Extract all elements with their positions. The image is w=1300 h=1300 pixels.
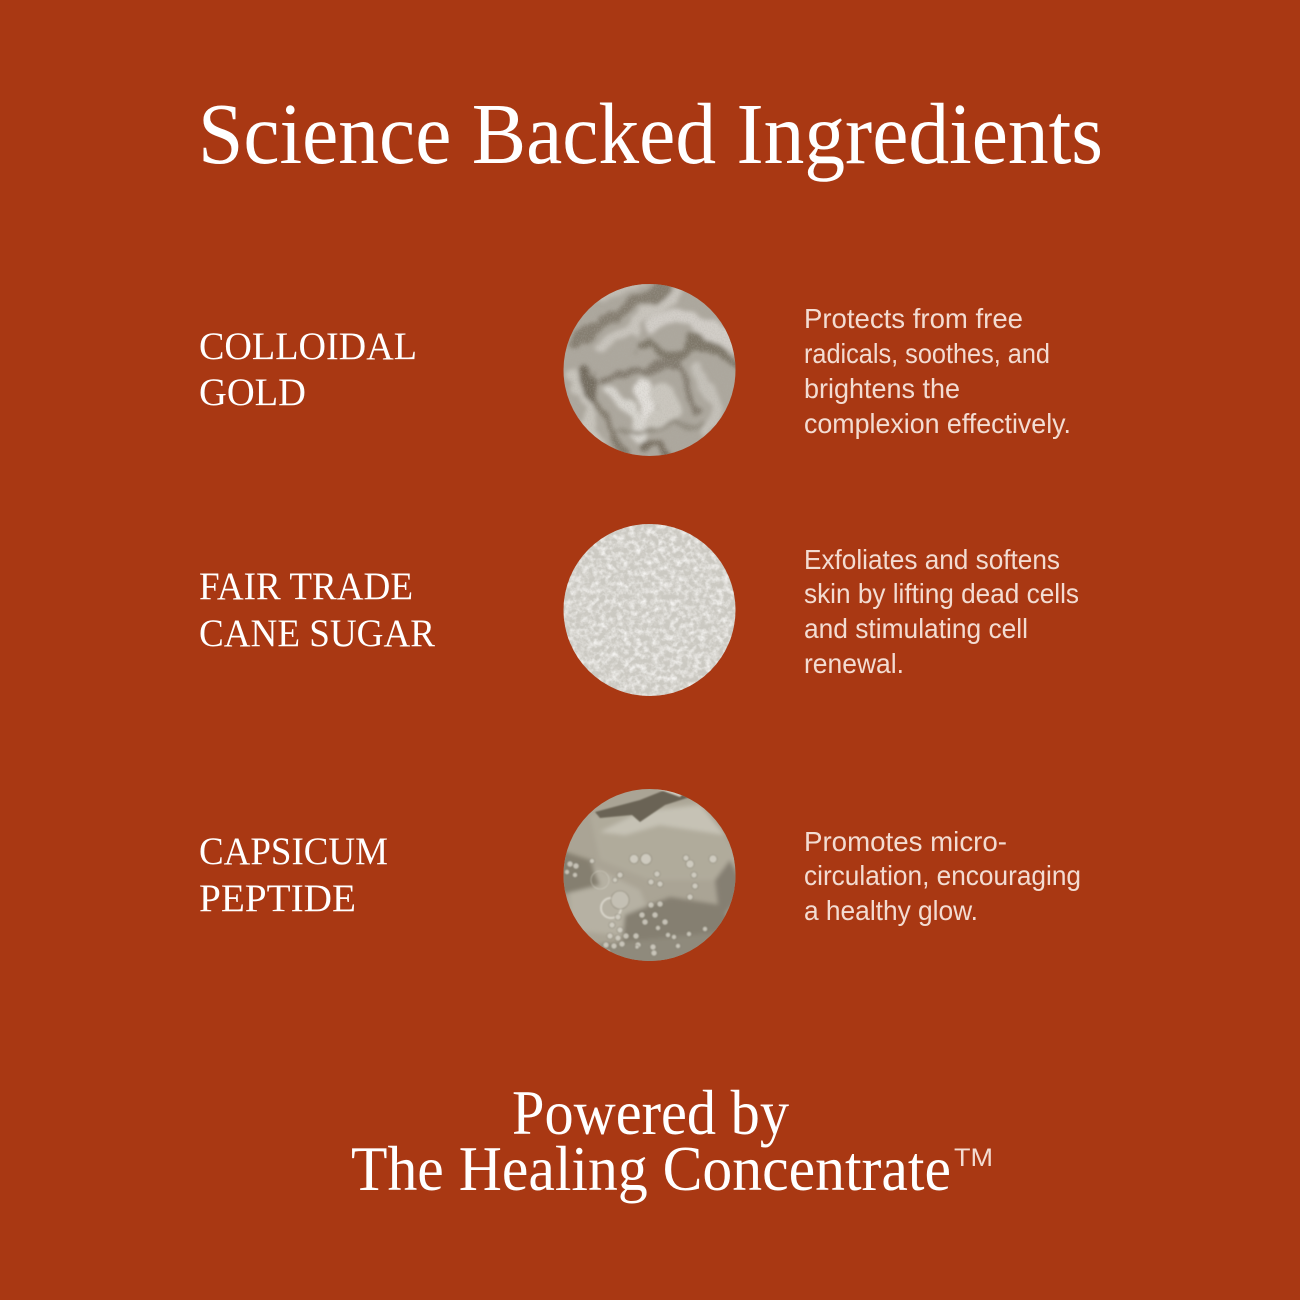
- ingredient name: fair trade cane sugar: [199, 565, 435, 655]
- ingredient name: colloidal gold: GOLD: [199, 371, 306, 414]
- ingredient name: colloidal gold: COLLOIDAL: [199, 325, 417, 368]
- description: cane sugar: renewal.: [804, 648, 904, 679]
- row: capsicum peptide: [199, 785, 1081, 970]
- description: capsicum peptide: Promotes micro-: [804, 826, 1007, 857]
- ingredient name: capsicum peptide: CAPSICUM: [199, 830, 388, 873]
- footer: powered by: [351, 1077, 993, 1204]
- ingredient name: capsicum peptide: [199, 830, 388, 920]
- description: cane sugar: and stimulating cell: [804, 613, 1028, 644]
- image: gel bubbles texture: [564, 789, 736, 961]
- title: Science Backed Ingredients: [198, 85, 1103, 182]
- row: colloidal gold: [199, 280, 1071, 460]
- description: colloidal gold: [804, 303, 1071, 439]
- description: colloidal gold: Protects from free: [804, 303, 1023, 334]
- footer: powered by: Powered by: [512, 1077, 789, 1148]
- description: colloidal gold: radicals, soothes, and: [804, 338, 1050, 369]
- description: colloidal gold: complexion effectively.: [804, 408, 1071, 439]
- ingredient name: capsicum peptide: PEPTIDE: [199, 877, 356, 920]
- description: colloidal gold: brightens the: [804, 373, 960, 404]
- ingredient name: fair trade cane sugar: FAIR TRADE: [199, 565, 413, 608]
- footer: powered by: The Healing Concentrate: [351, 1133, 951, 1204]
- ingredient name: fair trade cane sugar: CANE SUGAR: [199, 612, 435, 655]
- description: cane sugar: Exfoliates and softens: [804, 544, 1060, 575]
- image: gold swirl texture: [564, 284, 736, 456]
- description: cane sugar: [804, 544, 1079, 679]
- row: fair trade cane sugar: [199, 520, 1079, 700]
- description: cane sugar: skin by lifting dead cells: [804, 578, 1079, 609]
- description: capsicum peptide: [804, 826, 1081, 926]
- ingredient name: colloidal gold: [199, 325, 417, 414]
- description: capsicum peptide: circulation, encouraging: [804, 860, 1081, 891]
- description: capsicum peptide: a healthy glow.: [804, 895, 978, 926]
- image: sugar crystals texture: [560, 520, 740, 700]
- footer: powered by: TM: [954, 1144, 993, 1172]
